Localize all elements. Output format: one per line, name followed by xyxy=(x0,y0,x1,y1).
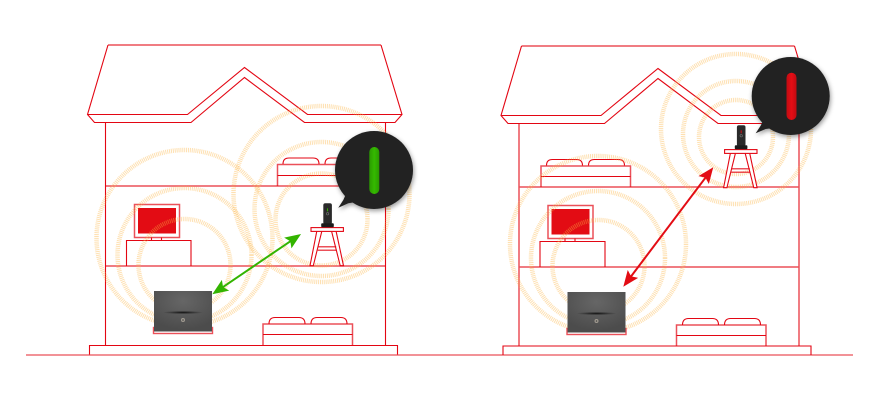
booster on stool, right house xyxy=(724,125,757,188)
signal rings around booster, right house xyxy=(661,54,811,204)
left house walls and floors xyxy=(106,122,386,345)
booster on stool, left house xyxy=(310,203,344,266)
router, right house xyxy=(567,292,626,334)
left house plinth xyxy=(90,346,398,354)
signal rings around router, right house xyxy=(510,156,686,332)
status bubble: green light xyxy=(335,131,413,209)
TV on desk, right house xyxy=(540,206,605,267)
status bubble: red light xyxy=(752,57,830,135)
ground line xyxy=(26,354,853,356)
left house roof xyxy=(88,45,402,122)
red double arrow: weak link xyxy=(618,163,718,291)
downstairs bed, left house xyxy=(263,318,352,345)
signal rings around router, left house xyxy=(96,150,272,326)
upstairs bed, right house xyxy=(541,160,630,187)
TV on desk, left house xyxy=(126,204,191,266)
right house shell xyxy=(501,46,816,355)
panel: right house, poor placement xyxy=(501,46,830,355)
downstairs bed, right house xyxy=(676,318,766,346)
router, left house xyxy=(154,291,212,334)
panel: left house, good placement xyxy=(88,45,413,354)
green double arrow: strong link xyxy=(209,229,305,300)
signal rings around booster, left house xyxy=(234,106,410,282)
upstairs bed, left house xyxy=(278,158,367,186)
